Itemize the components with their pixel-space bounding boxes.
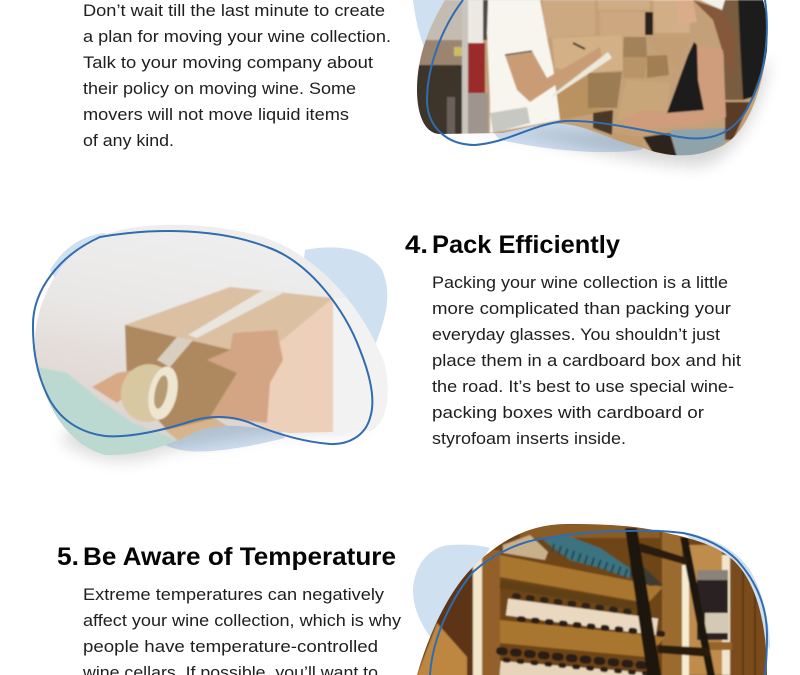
panel: step 4 image, taped box — [20, 215, 400, 465]
panel: step 3 text: a plan for moving your wine collection. — [83, 27, 391, 46]
panel: step 5 text: affect your wine collection, which is why — [83, 611, 402, 630]
decorative outline — [33, 231, 372, 444]
panel: step 3 text: movers will not move liquid items — [83, 105, 349, 124]
woman — [689, 0, 697, 23]
panel: step 3 text: Don’t wait till the last minute to create — [83, 1, 385, 20]
panel: step 4 text: more complicated than packing your — [432, 299, 731, 318]
shelves — [500, 555, 663, 603]
panel: step 3 text: of any kind. — [83, 131, 174, 150]
boxes — [543, 0, 595, 38]
panel: step 3 text — [83, 1, 391, 150]
panel: step 3 text: their policy on moving wine. Some — [83, 79, 356, 98]
panel: step 4 text: everyday glasses. You shouldn’t just — [432, 325, 720, 344]
heading: step 5: Be Aware of Temperature — [83, 543, 396, 571]
panel: step 5 text: people have temperature-controlled — [83, 637, 378, 656]
panel: step 4 text: Packing your wine collection is a little — [432, 273, 728, 292]
decorative outline — [430, 531, 767, 675]
bottles — [503, 535, 548, 560]
panel: step 4 text: the road. It’s best to use special wine- — [432, 377, 734, 396]
panel: step 4 text: packing boxes with cardboard or — [432, 403, 704, 422]
panel: step 4 text — [432, 273, 741, 448]
panel: step 5 text — [82, 585, 402, 675]
heading: step 4: Pack Efficiently — [432, 231, 620, 259]
image: movers with boxes — [413, 0, 775, 166]
heading: step 5: 5. — [57, 543, 79, 571]
panel: step 5 text: Extreme temperatures can negatively — [83, 585, 385, 604]
heading: step 4: 4. — [405, 231, 428, 259]
van — [426, 0, 462, 41]
decorative outline — [427, 0, 767, 145]
panel: step 4 text: styrofoam inserts inside. — [432, 429, 626, 448]
image: wine cellar — [410, 520, 775, 675]
panel: step 4 text: place them in a cardboard box and hit — [432, 351, 741, 370]
man — [487, 0, 560, 133]
ladder — [625, 528, 662, 675]
carried box — [617, 80, 670, 120]
panel: step 3 text: Talk to your moving company about — [83, 53, 373, 72]
